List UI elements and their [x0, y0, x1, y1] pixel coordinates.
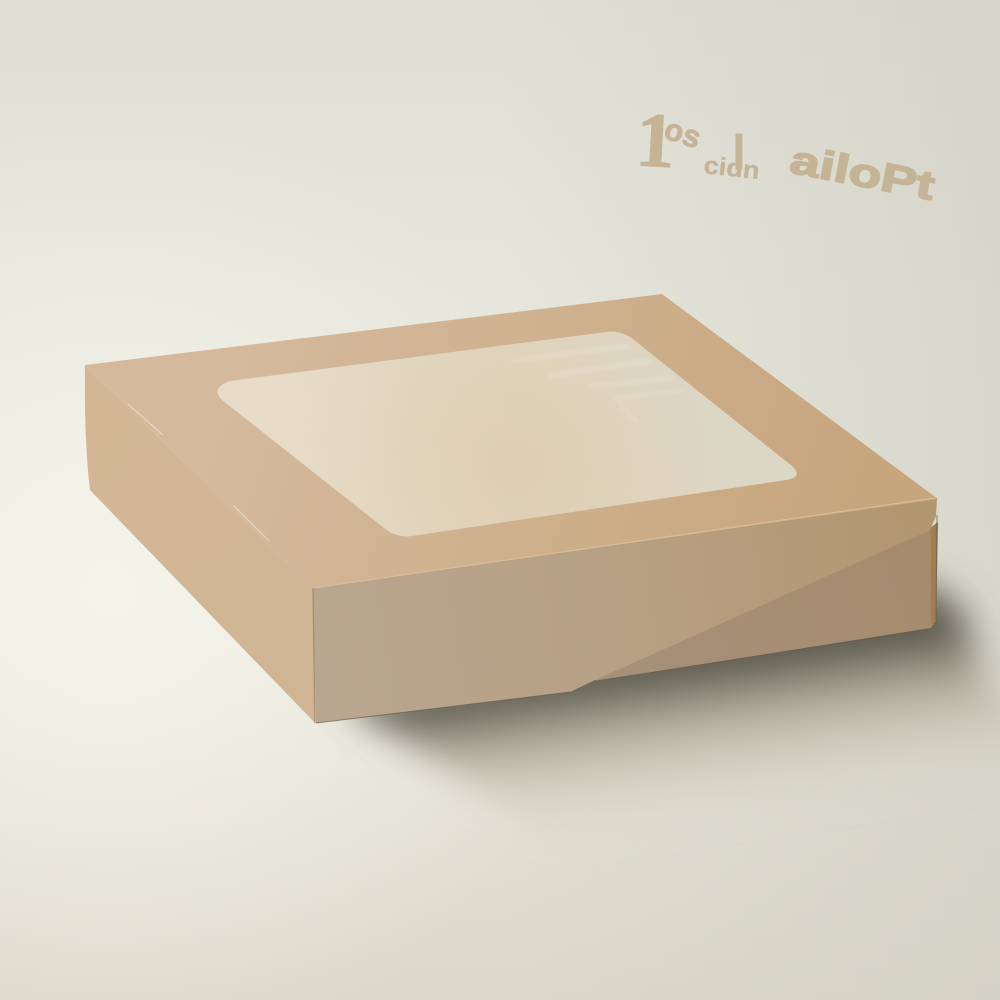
kraft box — [85, 294, 938, 723]
box: front corner edge — [313, 588, 315, 723]
heading lettering: l — [732, 125, 746, 181]
box: top lid — [85, 294, 938, 588]
heading lettering: 1 — [634, 95, 677, 184]
box: crease highlight — [313, 498, 935, 588]
box: left side panel — [85, 365, 315, 723]
heading lettering — [634, 95, 938, 209]
box: front side panel, lower tucked flap — [580, 525, 931, 681]
window reflections — [514, 347, 618, 386]
box: front side panel, upper flap — [313, 499, 937, 723]
heading lettering: cidn — [702, 151, 761, 185]
box: front bottom edge — [316, 515, 937, 723]
heading lettering: os — [660, 111, 705, 156]
box: slit marks — [128, 404, 269, 541]
box: right inner edge — [930, 522, 938, 630]
box: window — [218, 332, 797, 536]
heading lettering: ailoPt — [786, 138, 938, 209]
cast shadow — [340, 580, 1000, 860]
